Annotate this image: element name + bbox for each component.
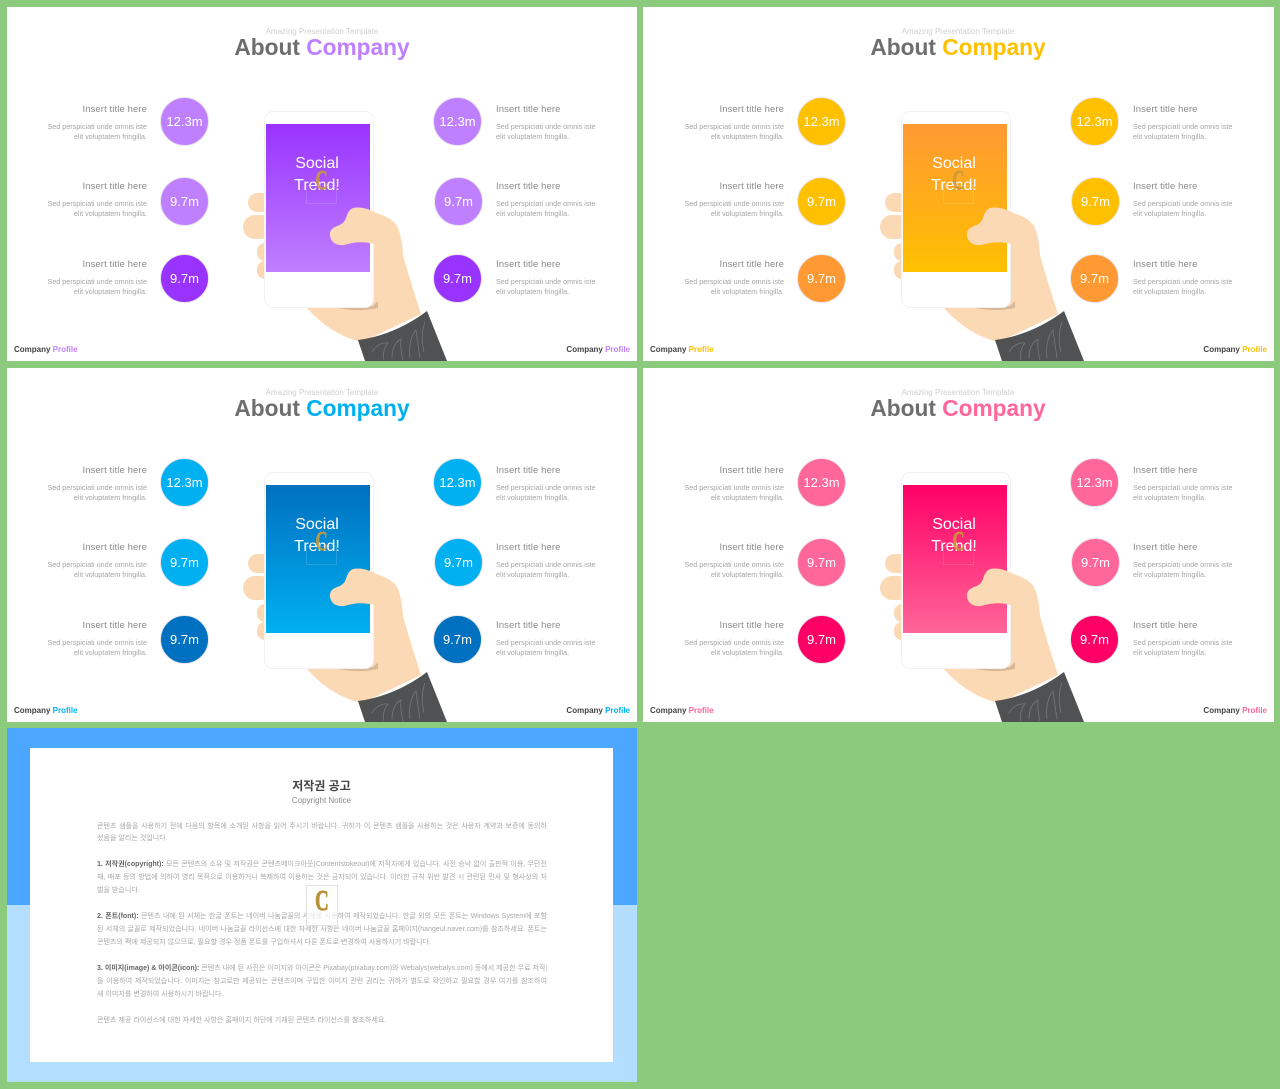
footer left: Company Profile <box>650 345 714 354</box>
badge: right value 3 <box>433 615 482 664</box>
text block: right item 1: Insert title here <box>1133 464 1198 476</box>
text block: right item 1 <box>1133 104 1232 141</box>
text block: left item 1 <box>48 104 147 141</box>
text block: left item 3: Insert title here <box>719 258 784 270</box>
screen text: Social <box>932 155 976 172</box>
text block: left item 3: Sed perspiciati unde omnis iste <box>685 277 784 286</box>
text block: right item 3: elit voluptatem fringilla. <box>496 648 569 657</box>
phone screen <box>903 124 1007 272</box>
icon: hand behind phone <box>880 193 1084 361</box>
notice heading: 저작권 공고 <box>292 779 351 793</box>
text block: left item 3: Sed perspiciati unde omnis iste <box>685 638 784 647</box>
title: About Company <box>234 34 410 60</box>
text block: left item 3 <box>48 258 147 296</box>
subtitle: Amazing Presentation Template <box>902 388 1014 397</box>
notice section 3: 3. 이미지(image) & 아이콘(icon): 콘텐츠 내에 된 사진은 이미지와 아이콘은 Pixabay(pixabay.com)와 Webalys(webalys.com) 등에서 제공한 무료 저작물 <box>97 965 547 972</box>
text block: right item 2: elit voluptatem fringilla. <box>1133 209 1206 218</box>
text block: right item 2 <box>1133 180 1232 218</box>
text block: right item 3: Sed perspiciati unde omnis iste <box>496 277 595 286</box>
notice intro: 콘텐츠 샘플을 사용하기 전에 다음의 항목에 소개된 사항을 읽어 주시기 바랍니다. 귀하가 이 콘텐츠 샘플을 사용하는 것은 사용자 계약과 보증에 동의하 <box>97 823 547 830</box>
phone screen <box>903 485 1007 633</box>
text block: right item 3 <box>1133 619 1274 669</box>
icon: thumb <box>643 368 1274 722</box>
badge: right value 1: 12.3m <box>1076 114 1113 129</box>
text block: right item 1: Sed perspiciati unde omnis iste <box>1133 483 1232 492</box>
text block: left item 3: Sed perspiciati unde omnis iste <box>48 638 147 647</box>
text block: left item 1: elit voluptatem fringilla. <box>74 132 147 141</box>
badge: right value 2 <box>434 538 483 587</box>
text block: left item 1: Sed perspiciati unde omnis iste <box>48 483 147 492</box>
text block: left item 2: Insert title here <box>719 542 784 552</box>
badge: right value 3: 9.7m <box>1080 271 1109 286</box>
text block: left item 3: Insert title here <box>719 620 784 630</box>
text block: right item 2 <box>496 542 596 579</box>
badge: left value 3: 9.7m <box>170 271 199 286</box>
watermark <box>943 525 974 564</box>
screen text: Trend! <box>294 538 340 555</box>
badge: left value 3 <box>797 254 846 303</box>
text block: right item 1: Insert title here <box>496 464 561 476</box>
badge: right value 3 <box>433 254 482 303</box>
text block: right item 2: Insert title here <box>1133 180 1198 192</box>
text block: left item 1: elit voluptatem fringilla. <box>74 493 147 502</box>
text block: left item 1: elit voluptatem fringilla. <box>711 132 784 141</box>
watermark <box>306 885 338 926</box>
text block: left item 2: elit voluptatem fringilla. <box>711 209 784 218</box>
badge: left value 3: 9.7m <box>807 271 836 286</box>
text block: right item 2: Sed perspiciati unde omnis iste <box>496 199 595 208</box>
text block: left item 3: Sed perspiciati unde omnis iste <box>48 277 147 286</box>
badge: right value 2: 9.7m <box>444 194 473 209</box>
text block: right item 2: Sed perspiciati unde omnis iste <box>496 560 595 569</box>
notice section 2 <box>7 728 637 1082</box>
notice subheading: Copyright Notice <box>292 796 351 805</box>
subtitle: Amazing Presentation Template <box>902 27 1014 36</box>
icon: thumb <box>966 208 1012 246</box>
notice section 3 <box>7 728 637 1082</box>
footer left: Company Profile <box>14 706 78 715</box>
phone body <box>901 472 1011 669</box>
text block: right item 3: elit voluptatem fringilla. <box>1133 287 1206 296</box>
badge: right value 2: 9.7m <box>444 555 473 570</box>
phone screen <box>266 485 370 633</box>
text block: right item 1: elit voluptatem fringilla. <box>496 493 569 502</box>
badge: right value 2 <box>1071 177 1120 226</box>
text block: left item 2: Sed perspiciati unde omnis iste <box>48 560 147 569</box>
text block: right item 2: Insert title here <box>496 542 561 552</box>
text block: right item 2: Sed perspiciati unde omnis iste <box>1133 199 1232 208</box>
notice intro <box>7 728 637 1082</box>
text block: right item 2: Insert title here <box>496 180 561 192</box>
text block: left item 2 <box>48 180 147 218</box>
title: About Company <box>870 34 1046 60</box>
text block: left item 3: Insert title here <box>82 258 147 270</box>
text block: right item 2: Insert title here <box>1133 542 1198 552</box>
screen text <box>903 514 1005 558</box>
text block: left item 1: Insert title here <box>719 104 784 114</box>
text block: right item 1 <box>496 464 596 502</box>
notice section 3: 새 이미지를 변경하여 사용하시기 바랍니다. <box>97 991 224 998</box>
notice closing line: 콘텐츠 제공 라이선스에 대한 자세한 사항은 홈페이지 하단에 기재된 콘텐츠 라이선스를 참조하세요. <box>97 1017 386 1024</box>
title: About Company <box>234 394 410 420</box>
notice section 2: 된 서체의 글꼴로 제작되었습니다. 네이버 나눔글꼴 라이선스에 대한 자세한 사항은 네이버 나눔글꼴 홈페이지(hangeul.naver.com)를 참조하세요. 폰트는 <box>97 926 547 933</box>
text block: right item 2: elit voluptatem fringilla. <box>496 570 569 579</box>
text block: left item 1: Sed perspiciati unde omnis iste <box>685 483 784 492</box>
text block: right item 3: Sed perspiciati unde omnis iste <box>1133 638 1232 647</box>
badge: left value 1: 12.3m <box>166 114 203 129</box>
badge: right value 2: 9.7m <box>1081 194 1110 209</box>
text block: left item 3 <box>684 258 784 296</box>
text block: left item 2 <box>644 541 784 591</box>
text block: right item 3: Sed perspiciati unde omnis iste <box>496 638 595 647</box>
panel: orange slide <box>643 7 1274 361</box>
badge: right value 3: 9.7m <box>443 632 472 647</box>
panel: purple slide <box>7 7 637 361</box>
text block: left item 2 <box>684 180 784 218</box>
text block: left item 3: elit voluptatem fringilla. <box>74 287 147 296</box>
footer left: Company Profile <box>650 706 714 715</box>
text block: right item 1: elit voluptatem fringilla. <box>1133 493 1206 502</box>
screen text <box>294 516 340 555</box>
text block: left item 1: Insert title here <box>719 464 784 476</box>
watermark: C <box>315 885 329 917</box>
badge: left value 1 <box>160 97 209 146</box>
panel: copyright notice <box>7 728 637 1082</box>
notice section 3: 을 이용하여 제작되었습니다. 이미지는 참고로만 제공되는 콘텐츠이며 구입한 이미지 관련 권리는 귀하가 별도로 확인하고 필요할 경우 여기를 참조하여 <box>97 978 547 985</box>
badge: right value 1: 12.3m <box>439 114 476 129</box>
text block: right item 1: elit voluptatem fringilla. <box>496 132 569 141</box>
watermark: C <box>315 165 328 195</box>
watermark: C <box>952 526 965 556</box>
text block: left item 3: elit voluptatem fringilla. <box>711 648 784 657</box>
badge: right value 3 <box>1070 254 1119 303</box>
phone body <box>264 111 374 308</box>
subtitle: Amazing Presentation Template <box>266 388 378 397</box>
icon: hand behind phone <box>643 368 1274 722</box>
text block: right item 1: elit voluptatem fringilla. <box>1133 132 1206 141</box>
notice section 1 <box>7 728 637 1082</box>
text block: left item 1: Sed perspiciati unde omnis iste <box>685 122 784 131</box>
text block: left item 2 <box>48 542 147 579</box>
text block: right item 1 <box>1133 464 1274 514</box>
badge: right value 1: 12.3m <box>1076 475 1113 490</box>
text block: right item 3: elit voluptatem fringilla. <box>496 287 569 296</box>
text block: right item 3: Insert title here <box>496 620 561 630</box>
text block: right item 3: Sed perspiciati unde omnis iste <box>1133 277 1232 286</box>
text block: left item 2: Insert title here <box>82 542 147 552</box>
badge: left value 1 <box>797 458 846 507</box>
badge: left value 1: 12.3m <box>803 114 840 129</box>
badge: left value 1: 12.3m <box>166 475 203 490</box>
badge: right value 1 <box>1070 97 1119 146</box>
badge: right value 3: 9.7m <box>1080 632 1109 647</box>
badge: left value 3: 9.7m <box>170 632 199 647</box>
badge: left value 2: 9.7m <box>807 194 836 209</box>
watermark <box>943 165 974 204</box>
badge: left value 2 <box>797 538 846 587</box>
text block: left item 1: elit voluptatem fringilla. <box>711 493 784 502</box>
text block: left item 2: elit voluptatem fringilla. <box>74 570 147 579</box>
watermark: C <box>952 165 965 195</box>
screen text: Trend! <box>931 177 977 194</box>
screen text <box>294 155 340 194</box>
text block: left item 3 <box>48 620 147 657</box>
badge: left value 2: 9.7m <box>170 194 199 209</box>
notice section 1: 재, 배포 등의 방법에 의하여 영리 목적으로 이용하거나 복제하여 이용하는 것은 금지되어 있습니다. 이러한 규칙 위반 발견 시 관련된 민사 및 형사상의 처 <box>97 874 547 881</box>
text block: left item 3: elit voluptatem fringilla. <box>711 287 784 296</box>
icon: hand behind phone <box>243 193 447 361</box>
text block: right item 1: Insert title here <box>1133 104 1198 114</box>
icon: hand behind phone <box>243 554 447 722</box>
text block: left item 3 <box>644 619 784 669</box>
notice intro: 셨음을 알리는 것입니다. <box>97 835 168 842</box>
badge: left value 2 <box>160 177 209 226</box>
notice section 2: 2. 폰트(font): 콘텐츠 내에 된 서체는 한글 폰트는 네이버 나눔글꼴의 서체를 사용하여 제작되었습니다. 한글 외의 모든 폰트는 Windows System에 포함 <box>97 913 547 920</box>
phone body <box>264 472 374 669</box>
screen text: Trend! <box>294 177 340 194</box>
text block: right item 1: Sed perspiciati unde omnis iste <box>496 122 595 131</box>
text block: right item 2 <box>496 180 596 218</box>
text block: left item 1 <box>684 104 784 141</box>
footer right: Company Profile <box>1203 706 1267 715</box>
text block: right item 3: Insert title here <box>496 258 561 270</box>
text block: left item 2: Insert title here <box>719 180 784 192</box>
screen text: Social <box>295 516 339 533</box>
text block: left item 2: Sed perspiciati unde omnis iste <box>685 199 784 208</box>
text block: right item 1 <box>496 104 596 141</box>
text block: left item 2: elit voluptatem fringilla. <box>74 209 147 218</box>
badge: right value 1 <box>433 458 482 507</box>
badge: left value 1 <box>797 97 846 146</box>
text block: right item 3 <box>496 258 596 296</box>
screen text <box>931 155 977 194</box>
badge: left value 3 <box>160 254 209 303</box>
watermark <box>306 526 337 565</box>
screen text: Social <box>295 155 339 172</box>
text block: right item 1: Sed perspiciati unde omnis iste <box>1133 122 1232 131</box>
panel: blue slide <box>7 368 637 722</box>
text block: right item 3 <box>1133 258 1232 296</box>
footer left: Company Profile <box>14 345 78 354</box>
badge: right value 3 <box>1070 615 1119 664</box>
notice section 2: 콘텐츠의 팩에 제공되지 않으므로, 필요할 경우 정품 폰트를 구입하셔서 다른 폰트로 변경하여 사용하시기 바랍니다. <box>97 939 431 946</box>
badge: left value 1 <box>160 458 209 507</box>
text block: left item 3: Insert title here <box>82 620 147 630</box>
text block: right item 2: elit voluptatem fringilla. <box>496 209 569 218</box>
badge: left value 2 <box>797 177 846 226</box>
badge: right value 2: 9.7m <box>1081 555 1110 570</box>
badge: left value 1: 12.3m <box>803 475 840 490</box>
text block: right item 3 <box>496 620 596 657</box>
text block: right item 1: Sed perspiciati unde omnis iste <box>496 483 595 492</box>
notice card <box>30 748 613 1062</box>
text block: right item 3: Insert title here <box>1133 620 1198 630</box>
text block: right item 3: Insert title here <box>1133 258 1198 270</box>
screen text: Social <box>932 516 976 533</box>
badge: right value 3: 9.7m <box>443 271 472 286</box>
badge: left value 3 <box>797 615 846 664</box>
text block: left item 2: Sed perspiciati unde omnis iste <box>48 199 147 208</box>
text block: right item 2 <box>1133 541 1274 591</box>
panel: pink slide <box>643 368 1274 722</box>
badge: left value 2: 9.7m <box>170 555 199 570</box>
text block: right item 2: elit voluptatem fringilla. <box>1133 570 1206 579</box>
badge: right value 2 <box>1071 538 1120 587</box>
icon: thumb <box>330 568 376 606</box>
title: About Company <box>870 394 1046 420</box>
subtitle: Amazing Presentation Template <box>266 27 378 36</box>
footer right: Company Profile <box>566 706 630 715</box>
icon: thumb <box>330 208 376 246</box>
text block: left item 1 <box>644 464 784 514</box>
text block: right item 1: Insert title here <box>496 104 561 114</box>
badge: right value 1 <box>433 97 482 146</box>
watermark <box>306 165 337 204</box>
badge: right value 1: 12.3m <box>439 475 476 490</box>
screen text: Trend! <box>931 538 977 555</box>
watermark: C <box>315 526 328 556</box>
text block: left item 1: Insert title here <box>82 104 147 114</box>
badge: left value 2 <box>160 538 209 587</box>
text block: left item 1: Insert title here <box>82 464 147 476</box>
badge: left value 2: 9.7m <box>807 555 836 570</box>
text block: right item 3: elit voluptatem fringilla. <box>1133 648 1206 657</box>
badge: left value 3 <box>160 615 209 664</box>
phone body <box>901 111 1011 308</box>
notice section 1: 벌을 받습니다. <box>97 887 140 894</box>
text block: left item 1: Sed perspiciati unde omnis iste <box>48 122 147 131</box>
text block: left item 2: Insert title here <box>82 180 147 192</box>
text block: left item 2: Sed perspiciati unde omnis iste <box>685 560 784 569</box>
badge: left value 3: 9.7m <box>807 632 836 647</box>
footer right: Company Profile <box>1203 345 1267 354</box>
phone screen <box>266 124 370 272</box>
text block: left item 3: elit voluptatem fringilla. <box>74 648 147 657</box>
badge: right value 1 <box>1070 458 1119 507</box>
text block: right item 2: Sed perspiciati unde omnis iste <box>1133 560 1232 569</box>
badge: right value 2 <box>434 177 483 226</box>
text block: left item 1 <box>48 464 147 502</box>
footer right: Company Profile <box>566 345 630 354</box>
text block: left item 2: elit voluptatem fringilla. <box>711 570 784 579</box>
notice section 1: 1. 저작권(copyright): 모든 콘텐츠의 소유 및 저작권은 콘텐츠메이크아웃(Contentstokeout)에 저작자에게 있습니다. 사전 승낙 없이 출판적 이용, 무단전 <box>97 861 547 868</box>
